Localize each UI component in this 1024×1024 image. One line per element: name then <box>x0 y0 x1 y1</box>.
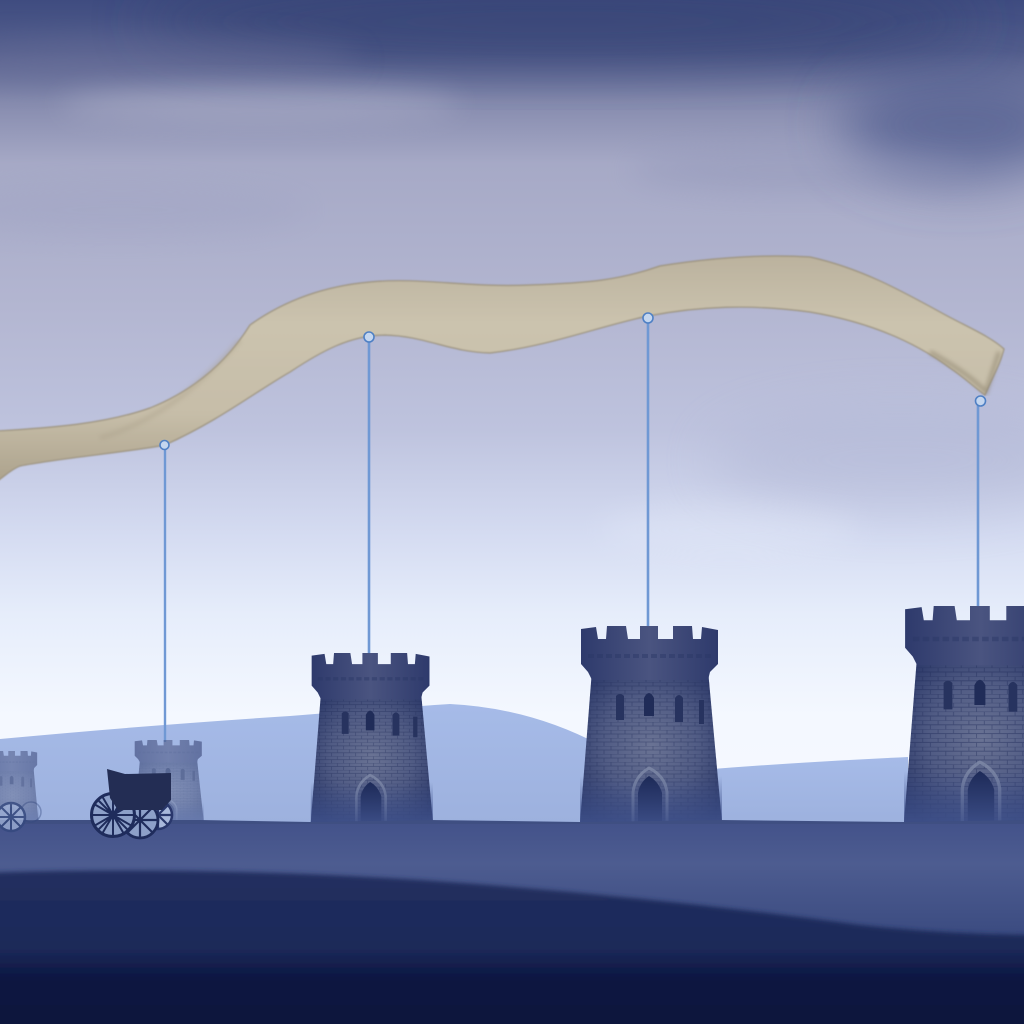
middle wheel <box>122 802 158 838</box>
distant hills <box>0 704 908 824</box>
connector 2 <box>364 332 374 656</box>
tower far left <box>0 751 39 824</box>
connector lines and pins <box>160 313 986 742</box>
tower right edge <box>904 606 1024 823</box>
connector 3 <box>643 313 653 630</box>
tower large <box>580 626 722 823</box>
ground band <box>0 820 1024 962</box>
far carriage <box>0 802 41 831</box>
foreground hill <box>0 871 1024 1024</box>
parchment ribbon <box>0 256 1004 482</box>
carriage <box>92 769 172 838</box>
tower medium <box>311 653 433 822</box>
storm clouds <box>0 0 1024 556</box>
tower small <box>134 740 204 822</box>
front wheel <box>92 794 134 836</box>
connector 4 <box>976 396 986 610</box>
connector 1 <box>160 440 169 742</box>
carriage cab <box>107 769 171 810</box>
rear wheel <box>144 801 172 829</box>
